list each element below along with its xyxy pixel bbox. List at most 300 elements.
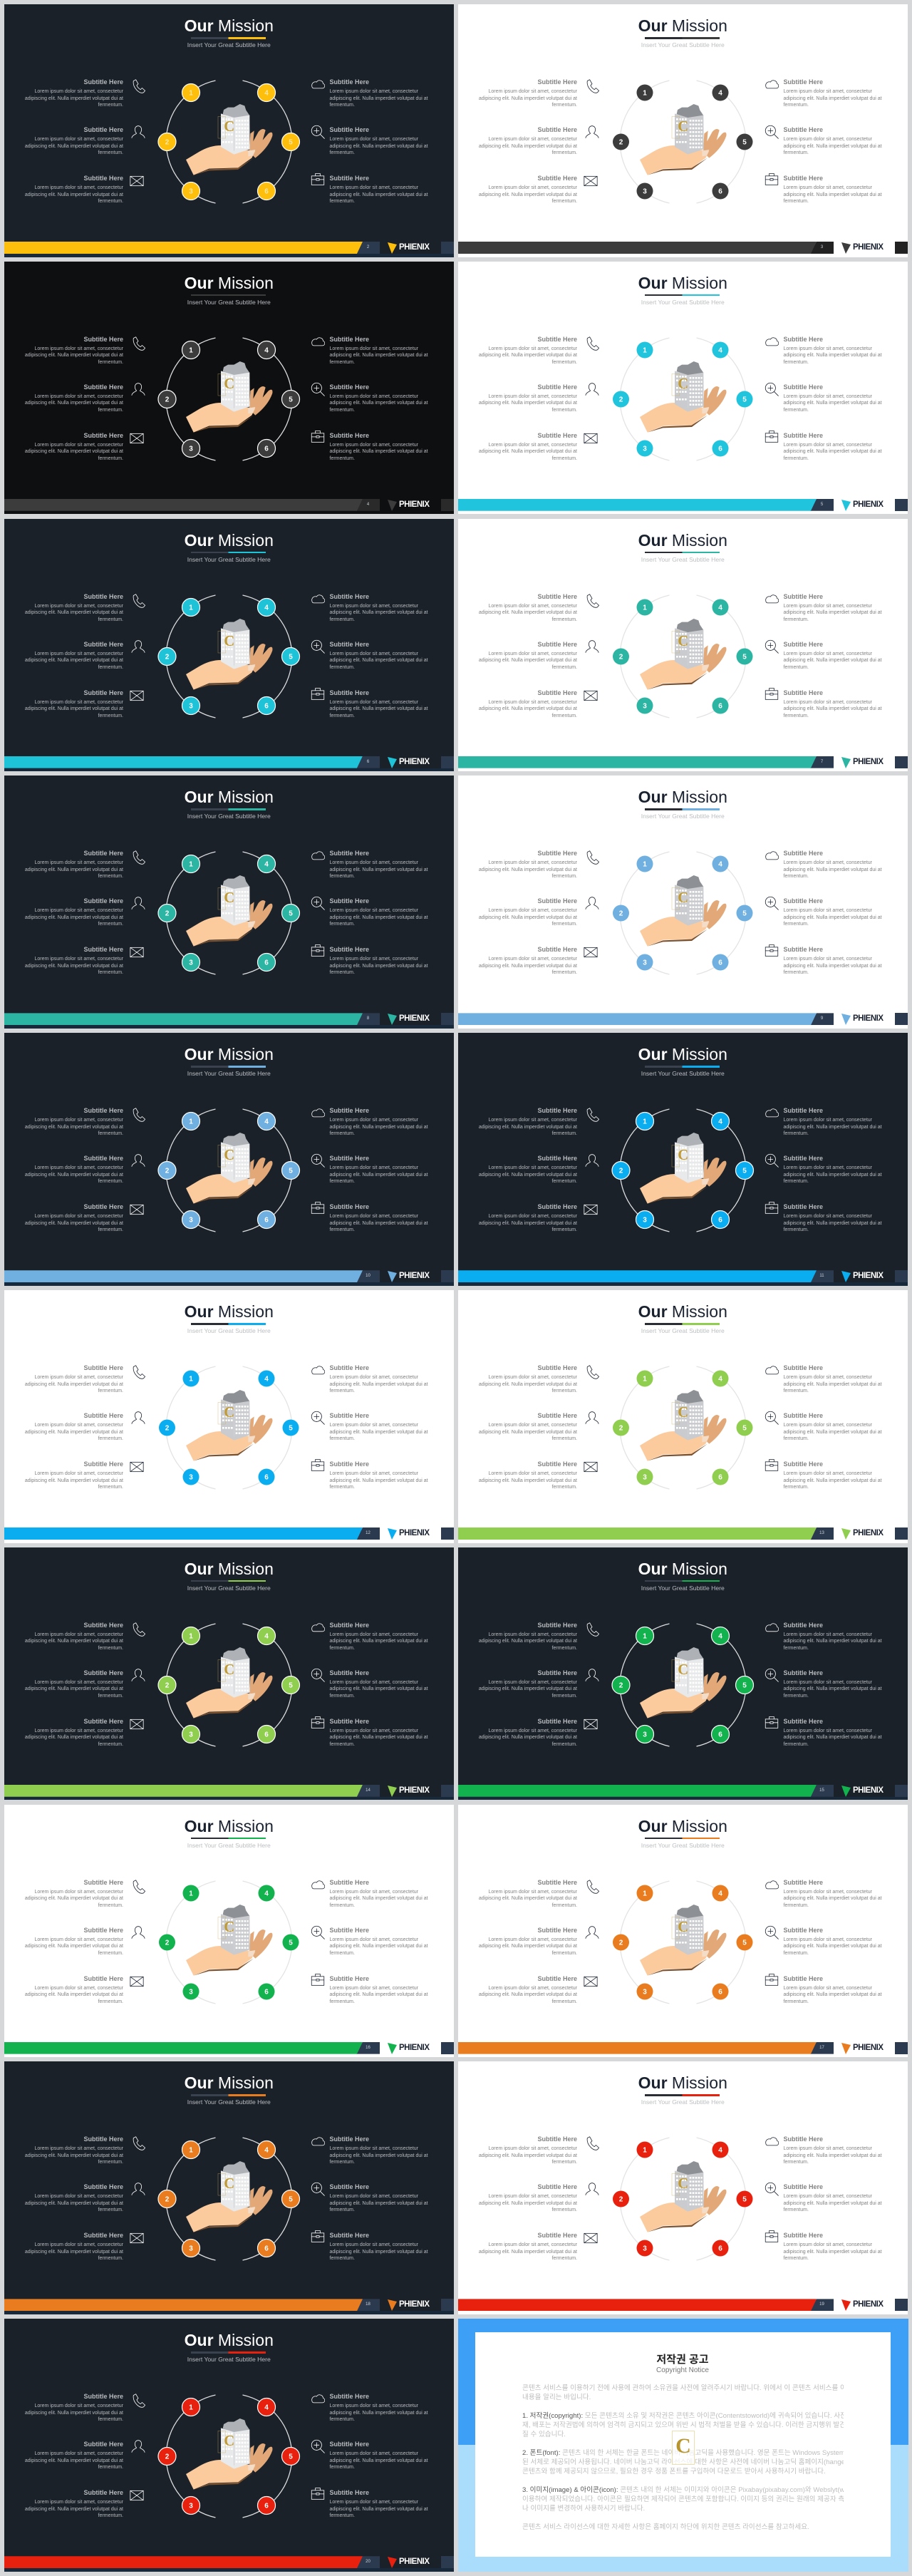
icon: person xyxy=(131,1411,145,1425)
footer bar: PHIENIX xyxy=(853,500,884,509)
subtitle: Insert Your Great Subtitle Here xyxy=(187,813,271,820)
text block 4: adipiscing elit. Nulla imperdiet volutpat dui at xyxy=(329,2153,428,2158)
text block 3: Subtitle Here xyxy=(537,1460,577,1468)
ring with numbered nodes: 3 xyxy=(643,959,647,967)
text block 6: adipiscing elit. Nulla imperdiet volutpat dui at xyxy=(329,1478,428,1483)
text block 5: fermentum. xyxy=(329,1951,355,1956)
ring with numbered nodes: 3 xyxy=(189,188,193,195)
text block 4: adipiscing elit. Nulla imperdiet volutpat dui at xyxy=(329,1125,428,1130)
icon: cloud xyxy=(311,1620,325,1634)
ring with numbered nodes: 5 xyxy=(289,1424,293,1433)
text block 6: Subtitle Here xyxy=(784,432,823,439)
text block 5: Lorem ipsum dolor sit amet, consectetur xyxy=(784,651,872,656)
icon: phone xyxy=(585,850,599,865)
text block 3 xyxy=(6,2488,123,2520)
subtitle: Insert Your Great Subtitle Here xyxy=(641,1842,725,1849)
text block 5: Subtitle Here xyxy=(329,1927,369,1934)
ring with numbered nodes xyxy=(608,587,757,726)
notice subheading: Copyright Notice xyxy=(656,2366,709,2374)
text block 6: Subtitle Here xyxy=(784,1718,823,1725)
ring with numbered nodes: 6 xyxy=(718,702,722,710)
ring with numbered nodes: 1 xyxy=(189,2147,193,2155)
text block 6 xyxy=(329,1717,447,1748)
title: Our Mission xyxy=(185,16,274,35)
intro paragraph xyxy=(475,2332,891,2333)
text block 4: Subtitle Here xyxy=(329,593,369,600)
ring with numbered nodes: 1 xyxy=(189,90,193,97)
text block 6: Lorem ipsum dolor sit amet, consectetur xyxy=(784,2242,872,2247)
illustration: hand holding building xyxy=(128,1343,328,1507)
text block 3 xyxy=(460,1460,577,1491)
text block 2: adipiscing elit. Nulla imperdiet volutpat dui at xyxy=(25,1430,123,1434)
icon: mail xyxy=(130,1717,144,1731)
icon: phone xyxy=(131,2394,145,2408)
text block 5 xyxy=(329,1669,447,1699)
title: Our Mission xyxy=(638,531,727,550)
ring with numbered nodes: 3 xyxy=(643,1731,647,1738)
text block 6: adipiscing elit. Nulla imperdiet volutpat dui at xyxy=(329,2507,428,2512)
text block 6: Subtitle Here xyxy=(784,1975,823,1982)
text block 1: Lorem ipsum dolor sit amet, consectetur xyxy=(489,1632,577,1637)
text block 6: fermentum. xyxy=(329,2256,355,2261)
text block 6: Subtitle Here xyxy=(329,1460,369,1468)
text block 4 xyxy=(784,592,901,623)
text block 2: Lorem ipsum dolor sit amet, consectetur xyxy=(34,1423,123,1428)
icon: briefcase xyxy=(765,943,779,957)
text block 1: fermentum. xyxy=(98,360,123,365)
icon: mail xyxy=(130,945,144,959)
text block 5: fermentum. xyxy=(329,922,355,927)
text block 6: Lorem ipsum dolor sit amet, consectetur xyxy=(329,957,418,962)
text block 1: fermentum. xyxy=(98,874,123,879)
ring with numbered nodes: 1 xyxy=(643,861,647,869)
text block 3: Subtitle Here xyxy=(537,689,577,696)
ring with numbered nodes: 3 xyxy=(643,1217,647,1225)
text block 5 xyxy=(784,897,901,928)
text block 4: fermentum. xyxy=(784,103,809,108)
text block 4: fermentum. xyxy=(329,360,355,365)
text block 1: fermentum. xyxy=(552,1903,577,1908)
ring with numbered nodes: 3 xyxy=(643,702,647,710)
text block 4: Subtitle Here xyxy=(329,2393,369,2400)
icon: magnifier xyxy=(765,1668,779,1682)
closing note: 콘텐츠 서비스 라이선스에 대한 자세한 사항은 홈페이지 하단에 위치한 콘텐츠 라이선스를 참고하세요. xyxy=(522,2523,809,2531)
text block 4: adipiscing elit. Nulla imperdiet volutpat dui at xyxy=(784,353,882,358)
text block 3: Lorem ipsum dolor sit amet, consectetur xyxy=(34,1214,123,1219)
ring with numbered nodes: 2 xyxy=(619,396,623,403)
text block 4 xyxy=(784,1106,901,1138)
text block 5 xyxy=(784,1926,901,1957)
ring with numbered nodes: 6 xyxy=(718,1731,722,1738)
footer bar xyxy=(4,2042,454,2054)
text block 2: fermentum. xyxy=(98,2465,123,2470)
text block 4: fermentum. xyxy=(329,874,355,879)
text block 2: adipiscing elit. Nulla imperdiet volutpat dui at xyxy=(25,2201,123,2206)
text block 6: Subtitle Here xyxy=(784,946,823,953)
text block 6 xyxy=(784,175,882,204)
text block 4 xyxy=(784,1364,901,1394)
ring with numbered nodes: 1 xyxy=(643,604,647,612)
text block 5: Lorem ipsum dolor sit amet, consectetur xyxy=(784,908,872,913)
ring with numbered nodes: 1 xyxy=(643,1632,647,1640)
text block 6 xyxy=(329,2488,447,2520)
ring with numbered nodes: 2 xyxy=(619,1168,623,1175)
text block 6: adipiscing elit. Nulla imperdiet volutpat dui at xyxy=(329,2250,428,2255)
footer bar: 15 xyxy=(819,1788,824,1793)
ring with numbered nodes: 6 xyxy=(718,1988,722,1996)
icon: briefcase xyxy=(765,1972,779,1987)
text block 2: adipiscing elit. Nulla imperdiet volutpat dui at xyxy=(25,1173,123,1178)
ring with numbered nodes: 3 xyxy=(189,959,193,967)
text block 2 xyxy=(6,1154,123,1185)
ring with numbered nodes: 3 xyxy=(189,2245,193,2253)
text block 1 xyxy=(460,849,577,880)
text block 3: Lorem ipsum dolor sit amet, consectetur xyxy=(34,957,123,962)
subtitle: Insert Your Great Subtitle Here xyxy=(641,1070,725,1077)
text block 2: adipiscing elit. Nulla imperdiet volutpat dui at xyxy=(25,915,123,920)
text block 3: fermentum. xyxy=(552,199,577,204)
footer bar xyxy=(4,1785,453,1800)
text block 4: Subtitle Here xyxy=(784,1622,823,1629)
text block 5: Lorem ipsum dolor sit amet, consectetur xyxy=(784,1680,872,1685)
ring with numbered nodes: 5 xyxy=(742,396,747,403)
text block 2 xyxy=(479,126,577,155)
text block 6: adipiscing elit. Nulla imperdiet volutpat dui at xyxy=(784,449,882,454)
icon: phone xyxy=(587,79,599,93)
ring with numbered nodes: 5 xyxy=(289,396,293,403)
text block 2: fermentum. xyxy=(552,150,577,155)
text block 4: fermentum. xyxy=(329,1903,355,1908)
text block 2: Lorem ipsum dolor sit amet, consectetur xyxy=(34,1680,123,1685)
text block 6: Lorem ipsum dolor sit amet, consectetur xyxy=(784,1729,872,1733)
text block 4 xyxy=(329,849,447,880)
text block 1: adipiscing elit. Nulla imperdiet volutpat dui at xyxy=(479,1639,577,1644)
icon: phone xyxy=(133,79,145,93)
text block 2: Lorem ipsum dolor sit amet, consectetur xyxy=(489,908,577,913)
text block 1: Subtitle Here xyxy=(83,336,123,343)
text block 3: Lorem ipsum dolor sit amet, consectetur xyxy=(34,1471,123,1476)
text block 1: Subtitle Here xyxy=(83,1107,123,1114)
text block 5: adipiscing elit. Nulla imperdiet volutpat dui at xyxy=(329,658,428,663)
ring with numbered nodes: 6 xyxy=(264,2245,269,2253)
illustration: hand holding building xyxy=(186,104,272,175)
text block 4: Subtitle Here xyxy=(329,850,369,857)
text block 3: adipiscing elit. Nulla imperdiet volutpat dui at xyxy=(25,192,123,197)
ring with numbered nodes: 5 xyxy=(742,2196,747,2204)
text block 3: fermentum. xyxy=(552,970,577,975)
text block 2: Lorem ipsum dolor sit amet, consectetur xyxy=(489,1423,577,1428)
illustration: hand holding building xyxy=(128,1600,328,1764)
panel: slide 4 black dark xyxy=(4,262,453,514)
text block 4: Subtitle Here xyxy=(784,593,823,600)
text block 1: fermentum. xyxy=(552,874,577,879)
subtitle: Insert Your Great Subtitle Here xyxy=(187,299,271,306)
text block 3: adipiscing elit. Nulla imperdiet volutpat dui at xyxy=(479,1221,577,1226)
ring with numbered nodes xyxy=(154,1615,304,1754)
text block 4: Lorem ipsum dolor sit amet, consectetur xyxy=(329,89,418,94)
text block 4: Subtitle Here xyxy=(329,78,369,86)
text block 4: fermentum. xyxy=(784,1903,809,1908)
text block 6: Subtitle Here xyxy=(329,946,369,953)
icon: person xyxy=(585,1668,599,1682)
text block 2: fermentum. xyxy=(552,922,577,927)
icon: person xyxy=(585,1925,599,1939)
text block 5 xyxy=(329,897,447,928)
icon: phone xyxy=(585,1108,599,1122)
text block 5: adipiscing elit. Nulla imperdiet volutpat dui at xyxy=(329,401,428,406)
text block 3: Lorem ipsum dolor sit amet, consectetur xyxy=(489,1986,577,1991)
text block 1: adipiscing elit. Nulla imperdiet volutpat dui at xyxy=(25,610,123,615)
text block 2: fermentum. xyxy=(98,1694,123,1699)
text block 5: Subtitle Here xyxy=(329,1669,369,1676)
footer bar: 6 xyxy=(367,760,369,764)
text block 6: fermentum. xyxy=(329,1742,355,1747)
text block 4: Subtitle Here xyxy=(784,1107,823,1114)
text block 5: adipiscing elit. Nulla imperdiet volutpat dui at xyxy=(329,2458,428,2463)
text block 2: Lorem ipsum dolor sit amet, consectetur xyxy=(489,394,577,399)
text block 1: adipiscing elit. Nulla imperdiet volutpat dui at xyxy=(25,1125,123,1130)
text block 5: Lorem ipsum dolor sit amet, consectetur xyxy=(329,908,418,913)
icon: briefcase xyxy=(311,173,325,185)
text block 1: adipiscing elit. Nulla imperdiet volutpat dui at xyxy=(479,610,577,615)
ring with numbered nodes: 6 xyxy=(718,2245,722,2253)
subtitle: Insert Your Great Subtitle Here xyxy=(187,1070,271,1077)
text block 2: Subtitle Here xyxy=(537,1669,577,1676)
text block 3: Lorem ipsum dolor sit amet, consectetur xyxy=(489,1729,577,1733)
footer bar xyxy=(458,499,908,511)
text block 3: adipiscing elit. Nulla imperdiet volutpat dui at xyxy=(25,1735,123,1740)
icon: person xyxy=(131,125,145,138)
text block 4: Lorem ipsum dolor sit amet, consectetur xyxy=(784,604,872,609)
text block 3: Subtitle Here xyxy=(537,946,577,953)
icon: magnifier xyxy=(311,1153,325,1168)
text block 6: fermentum. xyxy=(784,199,809,204)
icon: phone xyxy=(131,1365,145,1379)
panel: slide 17 orange light xyxy=(458,1805,908,2057)
text block 1: adipiscing elit. Nulla imperdiet volutpat dui at xyxy=(25,2411,123,2416)
text block 4: adipiscing elit. Nulla imperdiet volutpat dui at xyxy=(784,2153,882,2158)
text block 6 xyxy=(784,945,901,977)
ring with numbered nodes: 5 xyxy=(742,138,747,147)
text block 1: adipiscing elit. Nulla imperdiet volutpat dui at xyxy=(479,1896,577,1901)
text block 3: Lorem ipsum dolor sit amet, consectetur xyxy=(34,2500,123,2505)
text block 1: fermentum. xyxy=(98,617,123,622)
ring with numbered nodes: 2 xyxy=(165,1681,170,1689)
text block 5: fermentum. xyxy=(784,922,809,927)
text block 6: adipiscing elit. Nulla imperdiet volutpat dui at xyxy=(784,192,882,197)
text block 6: fermentum. xyxy=(329,2513,355,2518)
text block 5: adipiscing elit. Nulla imperdiet volutpat dui at xyxy=(784,915,882,920)
ring with numbered nodes: 5 xyxy=(289,1939,293,1947)
illustration: hand holding building xyxy=(582,1343,782,1507)
text block 5: Lorem ipsum dolor sit amet, consectetur xyxy=(329,2194,418,2199)
white notice card xyxy=(475,2332,891,2557)
icon: cloud xyxy=(765,1877,779,1892)
footer bar: PHIENIX xyxy=(853,758,884,766)
icon: cloud xyxy=(311,2134,325,2148)
text block 4: fermentum. xyxy=(784,874,809,879)
text block 6: adipiscing elit. Nulla imperdiet volutpat dui at xyxy=(329,1992,428,1997)
text block 3: Subtitle Here xyxy=(537,432,577,439)
text block 6: Subtitle Here xyxy=(329,1718,369,1725)
text block 6: adipiscing elit. Nulla imperdiet volutpat dui at xyxy=(329,1221,428,1226)
text block 5: adipiscing elit. Nulla imperdiet volutpat dui at xyxy=(784,1944,882,1949)
text block 4: Lorem ipsum dolor sit amet, consectetur xyxy=(784,860,872,865)
text block 3: fermentum. xyxy=(98,2513,123,2518)
title: Our Mission xyxy=(185,2073,274,2092)
text block 3: adipiscing elit. Nulla imperdiet volutpat dui at xyxy=(479,1735,577,1740)
text block 1: Subtitle Here xyxy=(83,1879,123,1886)
text block 6: fermentum. xyxy=(784,970,809,975)
subtitle: Insert Your Great Subtitle Here xyxy=(187,1842,271,1849)
icon: phone xyxy=(131,1622,145,1637)
icon: mail xyxy=(584,175,598,187)
icon: phone xyxy=(131,850,145,865)
icon: phone xyxy=(131,594,145,608)
icon: magnifier xyxy=(311,382,325,396)
text block 3: fermentum. xyxy=(98,199,123,204)
icon: person xyxy=(131,2182,145,2196)
icon: briefcase xyxy=(765,173,778,185)
text block 2: Subtitle Here xyxy=(83,1155,123,1162)
text block 2: fermentum. xyxy=(552,1951,577,1956)
text block 3: fermentum. xyxy=(98,456,123,461)
icon: person xyxy=(585,639,599,654)
text block 3: Lorem ipsum dolor sit amet, consectetur xyxy=(489,957,577,962)
ring with numbered nodes: 3 xyxy=(643,188,647,195)
text block 2: fermentum. xyxy=(98,2207,123,2212)
text block 6: Lorem ipsum dolor sit amet, consectetur xyxy=(784,957,872,962)
text block 3 xyxy=(6,2231,123,2262)
text block 4: Lorem ipsum dolor sit amet, consectetur xyxy=(784,89,872,94)
title: Our Mission xyxy=(638,1045,727,1063)
title: Our Mission xyxy=(185,2331,274,2349)
text block 6 xyxy=(329,2231,447,2262)
icon: person xyxy=(131,2439,145,2453)
text block 4: Subtitle Here xyxy=(784,1879,823,1886)
text block 4: Subtitle Here xyxy=(784,336,823,343)
text block 5: fermentum. xyxy=(784,665,809,670)
ring with numbered nodes: 6 xyxy=(264,2503,269,2510)
footer bar: PHIENIX xyxy=(853,2044,884,2052)
text block 6: fermentum. xyxy=(784,1999,809,2004)
text block 1: adipiscing elit. Nulla imperdiet volutpat dui at xyxy=(479,1381,577,1387)
text block 5 xyxy=(784,383,901,413)
panel: slide 12 bright blue light xyxy=(4,1290,453,1542)
text block 4: adipiscing elit. Nulla imperdiet volutpat dui at xyxy=(784,610,882,615)
text block 1 xyxy=(25,78,123,108)
text block 2: adipiscing elit. Nulla imperdiet volutpat dui at xyxy=(479,915,577,920)
text block 6: adipiscing elit. Nulla imperdiet volutpat dui at xyxy=(784,1221,882,1226)
text block 5: adipiscing elit. Nulla imperdiet volutpat dui at xyxy=(329,144,428,148)
ring with numbered nodes: 6 xyxy=(718,445,722,453)
text block 4 xyxy=(329,78,428,108)
text block 2: fermentum. xyxy=(98,1436,123,1441)
footer bar: PHIENIX xyxy=(853,2300,884,2309)
text block 4: Subtitle Here xyxy=(329,1364,369,1371)
text block 5: Subtitle Here xyxy=(329,2183,369,2190)
title: Our Mission xyxy=(638,16,727,35)
text block 3 xyxy=(460,1202,577,1234)
text block 3: adipiscing elit. Nulla imperdiet volutpat dui at xyxy=(479,964,577,969)
text block 2: fermentum. xyxy=(98,922,123,927)
text block 5: adipiscing elit. Nulla imperdiet volutpat dui at xyxy=(329,1944,428,1949)
text block 3: Lorem ipsum dolor sit amet, consectetur xyxy=(489,700,577,705)
text block 2 xyxy=(460,1411,577,1443)
text block 4: adipiscing elit. Nulla imperdiet volutpat dui at xyxy=(784,867,882,872)
ring with numbered nodes: 2 xyxy=(165,2196,170,2204)
text block 4: fermentum. xyxy=(329,103,355,108)
text block 3 xyxy=(6,1460,123,1491)
text block 2: Subtitle Here xyxy=(83,1927,123,1934)
text block 3: adipiscing elit. Nulla imperdiet volutpat dui at xyxy=(25,706,123,711)
text block 3: fermentum. xyxy=(552,1999,577,2004)
text block 4: Subtitle Here xyxy=(784,850,823,857)
text block 6: Lorem ipsum dolor sit amet, consectetur xyxy=(784,185,872,190)
text block 6: Lorem ipsum dolor sit amet, consectetur xyxy=(329,1729,418,1733)
text block 3: Subtitle Here xyxy=(537,1975,577,1982)
text block 5: fermentum. xyxy=(784,150,809,155)
text block 2: Lorem ipsum dolor sit amet, consectetur xyxy=(489,137,577,142)
text block 3 xyxy=(25,175,123,204)
icon: mail xyxy=(130,1974,144,1989)
ring with numbered nodes: 3 xyxy=(189,1217,193,1225)
icon: cloud xyxy=(311,1877,325,1892)
text block 4: Lorem ipsum dolor sit amet, consectetur xyxy=(329,346,418,351)
subtitle: Insert Your Great Subtitle Here xyxy=(641,299,725,306)
text block 5: fermentum. xyxy=(329,2465,355,2470)
text block 3: Subtitle Here xyxy=(83,2489,123,2496)
subtitle: Insert Your Great Subtitle Here xyxy=(187,2098,271,2106)
text block 4: Subtitle Here xyxy=(784,78,823,86)
text block 1 xyxy=(460,1621,577,1652)
panel: slide 13 lime light xyxy=(458,1290,908,1542)
text block 2: Lorem ipsum dolor sit amet, consectetur xyxy=(34,2194,123,2199)
ring with numbered nodes: 6 xyxy=(718,959,722,967)
text block 6 xyxy=(329,175,428,204)
icon: magnifier xyxy=(765,639,779,654)
ring with numbered nodes: 3 xyxy=(643,1474,647,1481)
text block 5: adipiscing elit. Nulla imperdiet volutpat dui at xyxy=(329,2201,428,2206)
icon: briefcase xyxy=(765,1715,779,1729)
text block 6: fermentum. xyxy=(329,970,355,975)
text block 2 xyxy=(460,1669,577,1699)
text block 4 xyxy=(784,849,901,880)
icon: cloud xyxy=(311,592,325,606)
text block 5: adipiscing elit. Nulla imperdiet volutpat dui at xyxy=(784,401,882,406)
text block 5: Subtitle Here xyxy=(329,2441,369,2448)
text block 6: adipiscing elit. Nulla imperdiet volutpat dui at xyxy=(329,964,428,969)
ring with numbered nodes: 1 xyxy=(189,2404,193,2412)
text block 4 xyxy=(329,2135,447,2166)
text block 3 xyxy=(6,1974,123,2005)
text block 2: Lorem ipsum dolor sit amet, consectetur xyxy=(489,651,577,656)
text block 2: fermentum. xyxy=(98,1951,123,1956)
text block 3: Lorem ipsum dolor sit amet, consectetur xyxy=(489,2242,577,2247)
watermark logo xyxy=(672,2431,695,2465)
text block 2 xyxy=(460,897,577,928)
text block 4: Subtitle Here xyxy=(329,336,369,343)
text block 2: fermentum. xyxy=(552,2207,577,2212)
text block 1: Subtitle Here xyxy=(537,850,577,857)
text block 1: adipiscing elit. Nulla imperdiet volutpat dui at xyxy=(25,96,123,101)
title: Our Mission xyxy=(638,2073,727,2092)
icon: person xyxy=(585,896,599,910)
text block 1 xyxy=(460,2135,577,2166)
text block 2: Subtitle Here xyxy=(83,383,123,391)
icon: phone xyxy=(585,1365,599,1379)
icon: person xyxy=(131,639,145,654)
